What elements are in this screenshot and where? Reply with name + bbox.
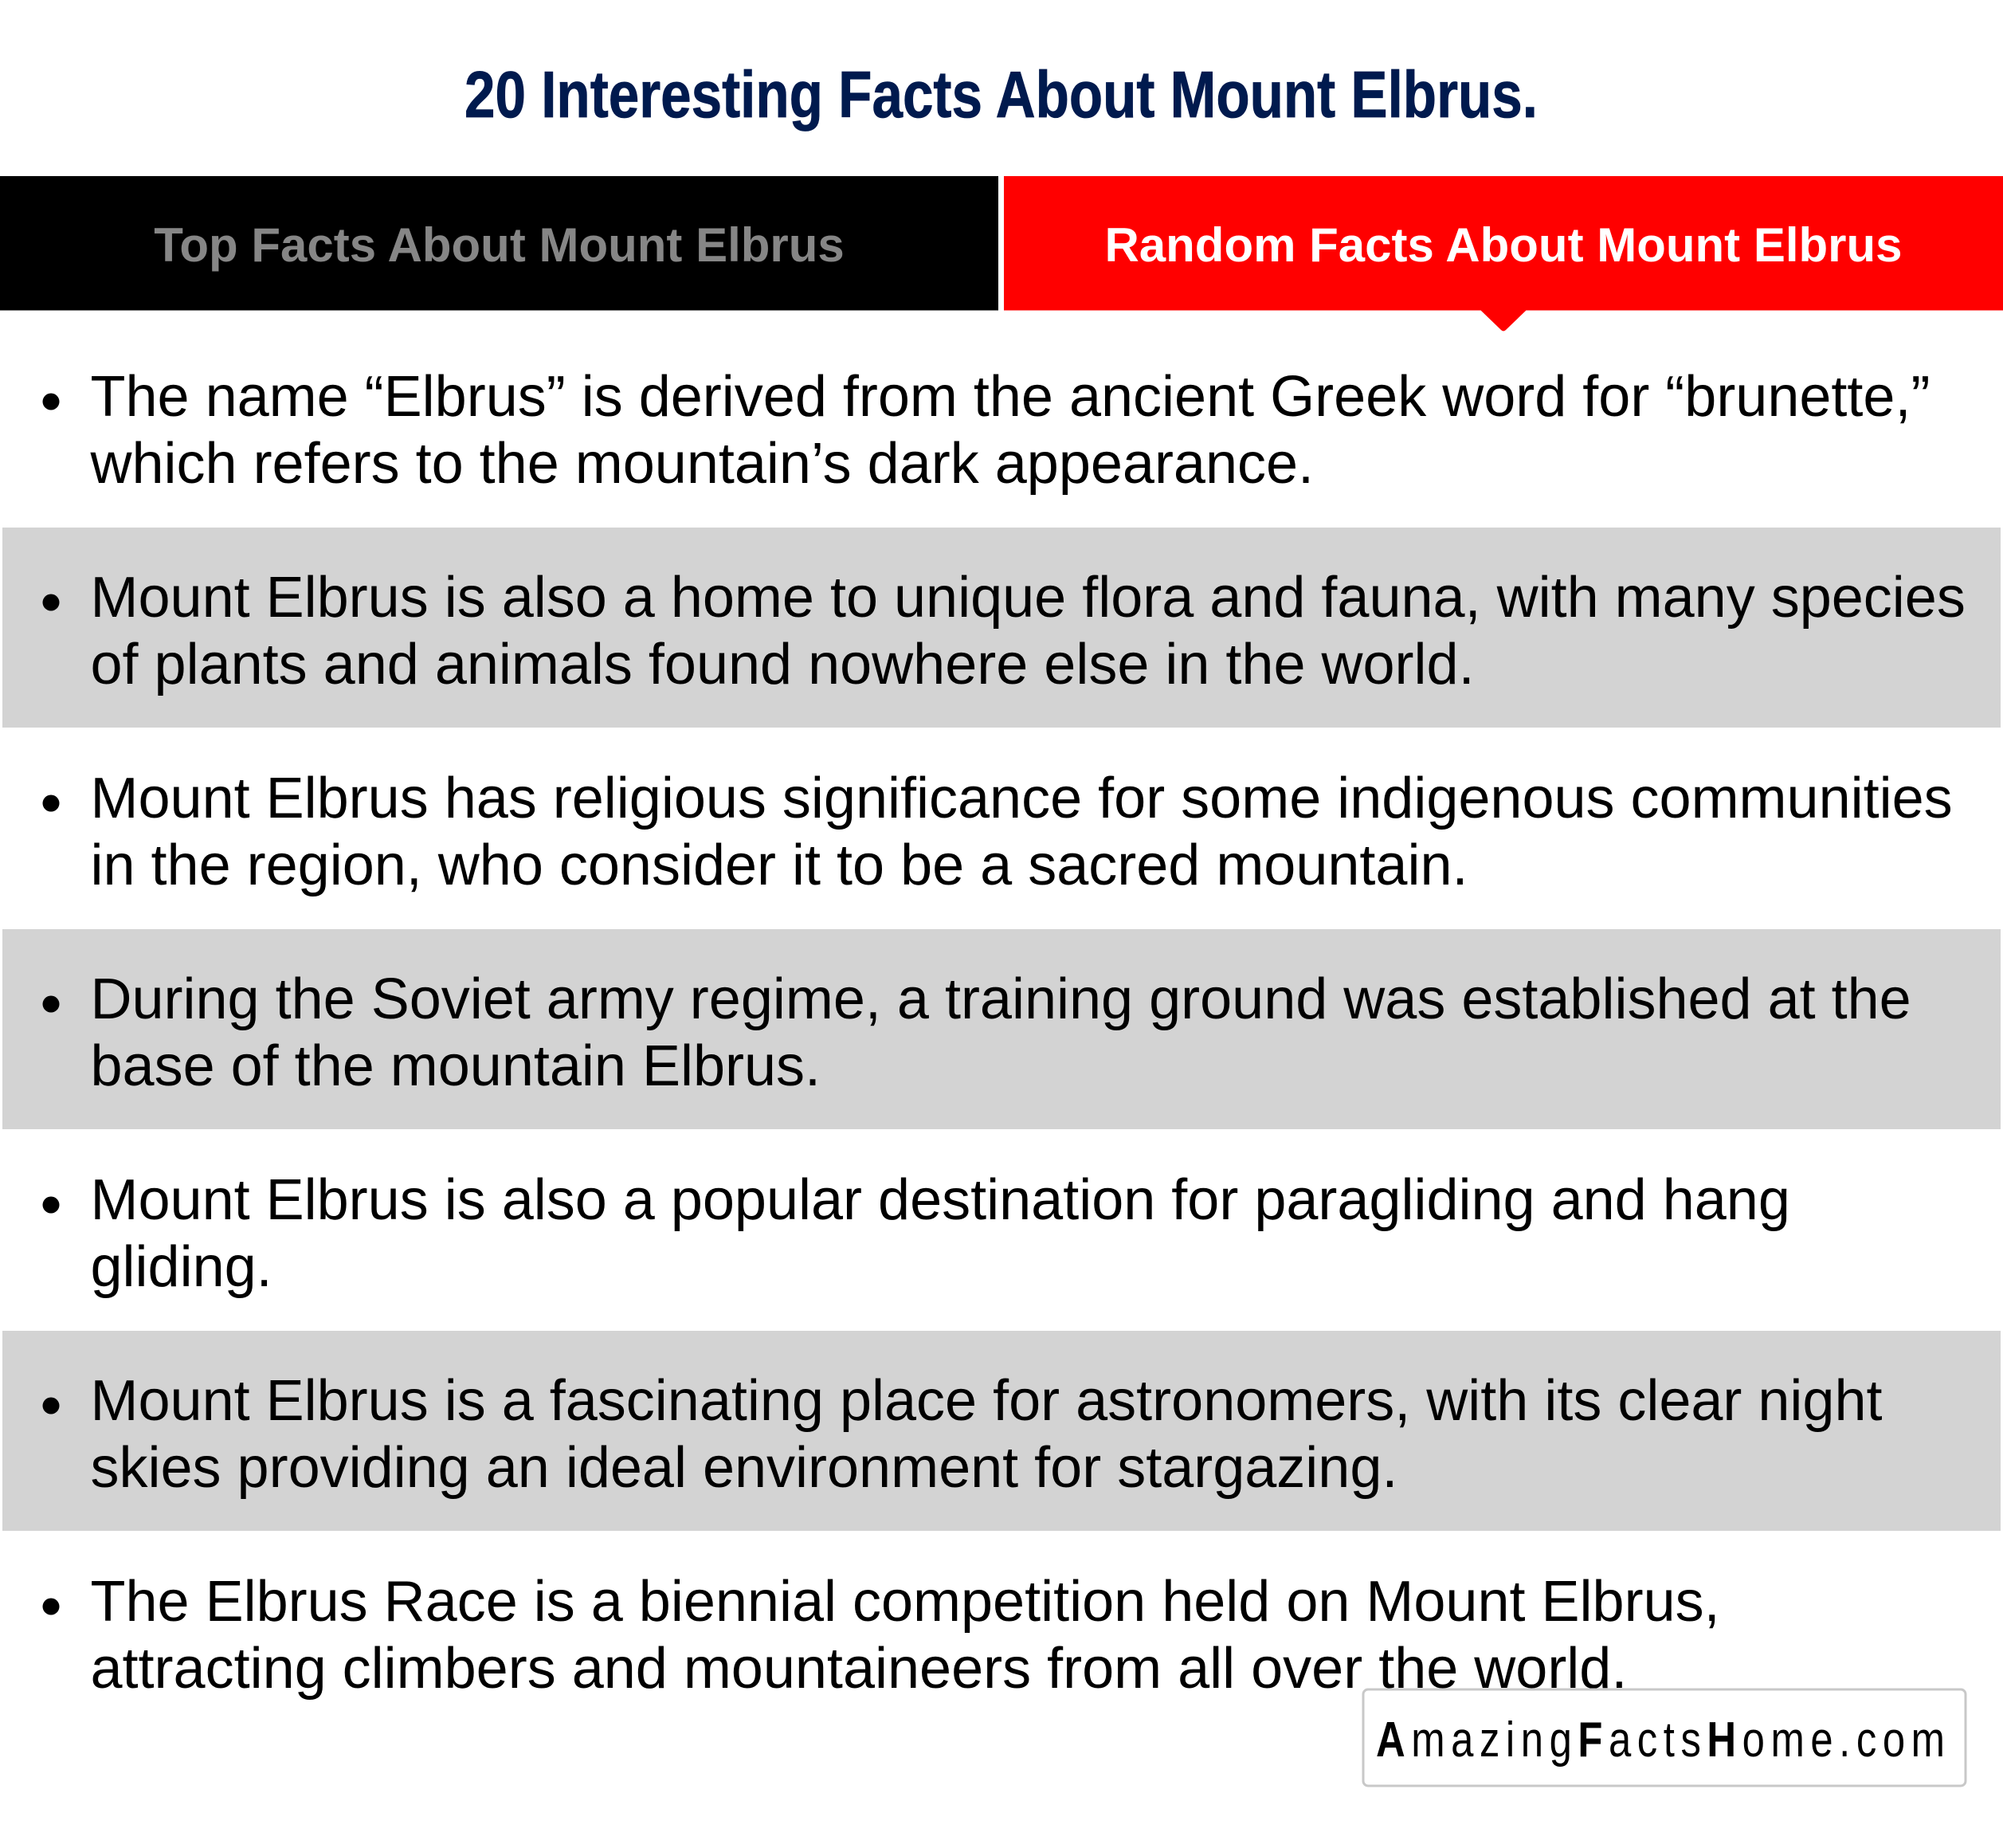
fact row 5: [43, 1168, 1790, 1299]
fact row 2: of plants and animals found nowhere else in the world.: [91, 633, 1475, 696]
title: 20 Interesting Facts About Mount Elbrus.: [464, 57, 1538, 131]
fact row 1: [43, 365, 1930, 496]
fact row 3: [43, 767, 1953, 897]
fact row 7: [43, 1570, 1720, 1701]
tab: top facts: [0, 176, 998, 311]
fact row 4: base of the mountain Elbrus.: [91, 1034, 821, 1098]
tab: random facts (active): Random Facts About Mount Elbrus: [1104, 218, 1903, 272]
fact row 3: in the region, who consider it to be a sacred mountain.: [91, 834, 1468, 897]
fact row 1: which refers to the mountain’s dark appearance.: [89, 432, 1314, 496]
fact row 6: skies providing an ideal environment for stargazing.: [91, 1436, 1397, 1500]
fact row 2: [2, 528, 2001, 728]
tab: random facts (active): [1004, 176, 2003, 332]
fact row 4: During the Soviet army regime, a training ground was established at the: [91, 967, 1911, 1031]
fact row 2: Mount Elbrus is also a home to unique flora and fauna, with many species: [91, 566, 1966, 630]
fact row 6: [2, 1331, 2001, 1531]
fact row 7: The Elbrus Race is a biennial competition held on Mount Elbrus,: [91, 1570, 1720, 1634]
fact row 3: Mount Elbrus has religious significance for some indigenous communities: [91, 767, 1953, 830]
fact row 4: [2, 929, 2001, 1129]
watermark badge: AmazingFactsHome.com: [1376, 1713, 1951, 1768]
fact row 5: Mount Elbrus is also a popular destination for paragliding and hang: [91, 1168, 1790, 1232]
fact row 1: The name “Elbrus” is derived from the ancient Greek word for “brunette,”: [91, 365, 1930, 429]
tab: top facts: Top Facts About Mount Elbrus: [154, 218, 845, 272]
watermark badge: [1363, 1689, 1966, 1786]
fact row 6: Mount Elbrus is a fascinating place for astronomers, with its clear night: [91, 1369, 1883, 1433]
fact row 5: gliding.: [91, 1235, 272, 1299]
fact row 7: attracting climbers and mountaineers from all over the world.: [91, 1637, 1627, 1701]
